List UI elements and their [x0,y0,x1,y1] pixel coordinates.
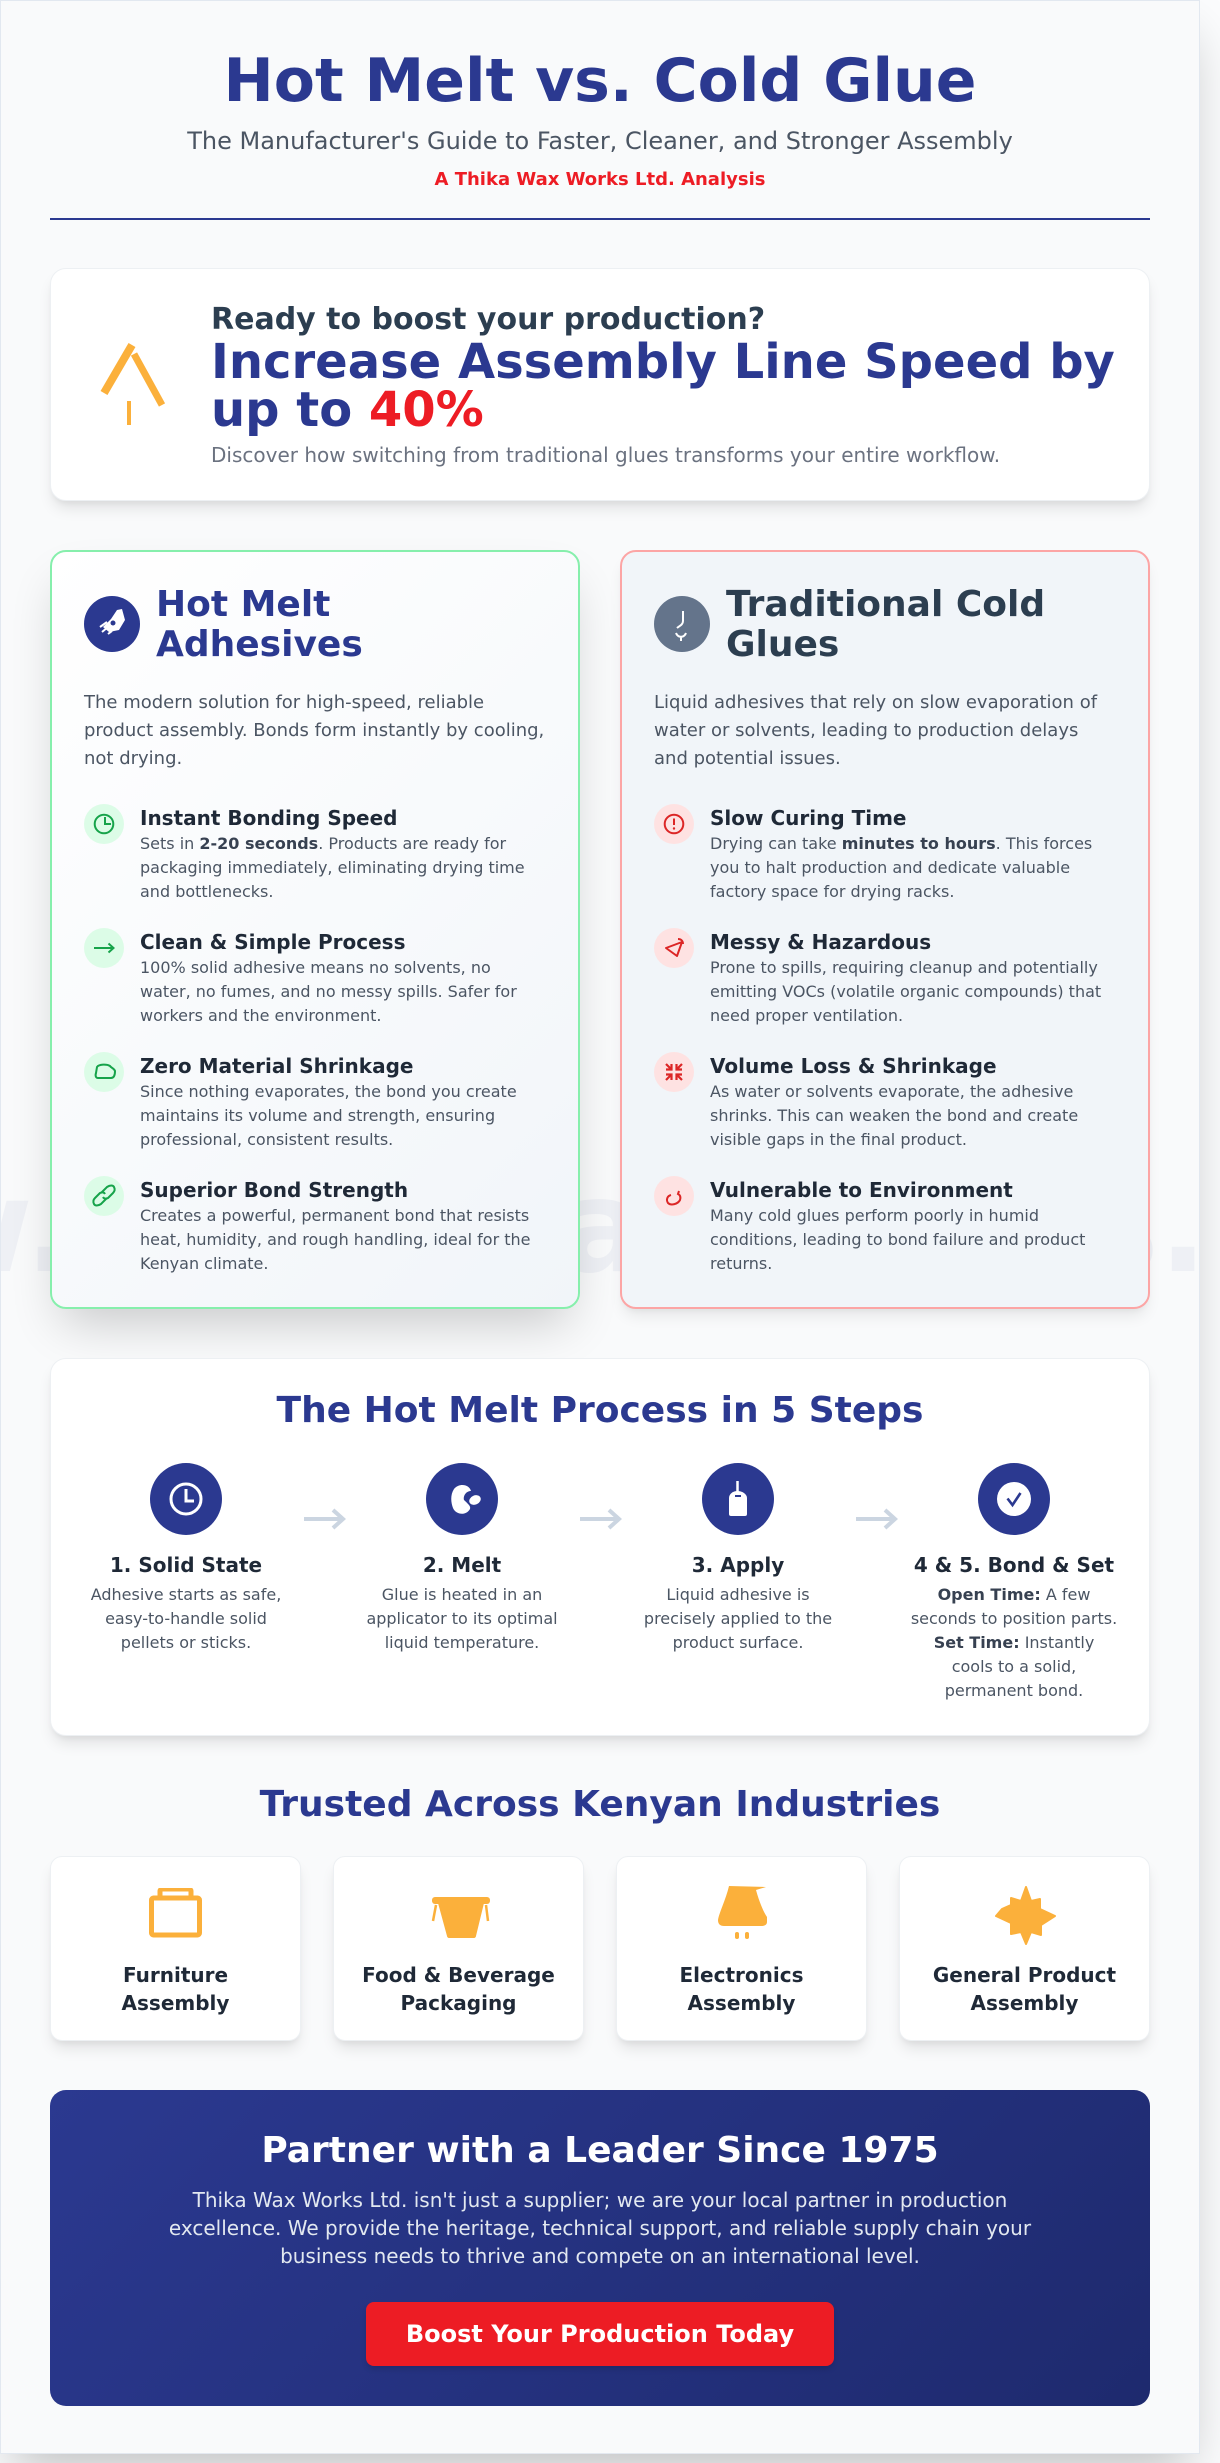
step 2 [366,1463,558,1652]
drawback text: visible gaps in the final product. [710,1130,967,1149]
icon: check [978,1463,1050,1535]
label: General Product [933,1963,1116,1987]
industry card: general product [899,1856,1150,2041]
benefit text [140,1082,517,1149]
industry card: food and beverage [333,1856,584,2041]
label: Assembly [688,1991,795,2015]
step 4 and 5 text: seconds to position parts. [911,1609,1117,1628]
icon: arrow [84,928,124,968]
cold glue description: water or solvents, leading to production delays [654,720,1078,741]
icon: blob [84,1052,124,1092]
benefit text: 100% solid adhesive means no solvents, no [140,958,491,977]
hot melt heading [156,584,363,665]
benefit: superior bond strength [84,1176,531,1273]
benefit: instant bonding speed [84,804,525,901]
step 1 [90,1463,281,1652]
icon: hook [654,1176,694,1216]
hero headline: Increase Assembly Line Speed by [211,334,1115,390]
step 3 text: product surface. [673,1633,803,1652]
icon: star badge [993,1885,1059,1947]
step 4 and 5 text: permanent bond. [945,1681,1083,1700]
benefit text [140,1206,531,1273]
drawback text: shrinks. This can weaken the bond and create [710,1106,1078,1125]
label: Assembly [122,1991,229,2015]
button: Boost Your Production Today [406,2320,794,2348]
analysis label: A Thika Wax Works Ltd. Analysis [435,169,765,190]
drawback: vulnerable to environment [654,1176,1085,1273]
benefit: clean and simple process [84,928,517,1025]
industry card: furniture [50,1856,301,2041]
icon: furniture case [148,1888,204,1940]
drawback text: conditions, leading to bond failure and product [710,1230,1085,1249]
partner text: excellence. We provide the heritage, technical support, and reliable supply chain your [169,2216,1031,2240]
step 4 and 5 [894,1463,1134,1713]
benefit title: Superior Bond Strength [140,1178,408,1202]
drawback text [710,834,1092,901]
label: Packaging [400,1991,516,2015]
header divider [50,218,1150,220]
cold glue description [654,692,1098,769]
step 1 text: easy-to-handle solid [105,1609,267,1628]
drawback text [710,1206,1085,1273]
step 4 and 5 text: Open Time: A few [938,1585,1090,1604]
arrow 2 [579,1508,623,1530]
panel: traditional cold glues [620,550,1150,1309]
hot melt heading: Hot Melt [156,584,330,625]
icon: clock [84,804,124,844]
benefit text [140,834,525,901]
icon: up arrow [100,343,165,425]
cold glue heading: Traditional Cold [726,584,1045,625]
step 1 text: pellets or sticks. [121,1633,251,1652]
icon: link [84,1176,124,1216]
step 1 title: 1. Solid State [110,1553,262,1577]
panel: hot melt adhesives [50,550,580,1309]
label: Electronics [680,1963,803,1987]
step 3 [618,1463,858,1663]
benefit title: Clean & Simple Process [140,930,406,954]
icon: flask [718,1885,768,1943]
industry card: electronics [616,1856,867,2041]
hero headline [211,334,1115,438]
icon: alert [654,804,694,844]
step 1 text: Adhesive starts as safe, [91,1585,281,1604]
step 3 text: precisely applied to the [644,1609,832,1628]
drawback title: Messy & Hazardous [710,930,931,954]
drawback text: Drying can take minutes to hours. This forces [710,834,1092,853]
benefit text: Since nothing evaporates, the bond you create [140,1082,517,1101]
drawback text: you to halt production and dedicate valuable [710,858,1070,877]
icon: pellet clock [150,1463,222,1535]
step 4 and 5 title: 4 & 5. Bond & Set [914,1553,1114,1577]
process heading: The Hot Melt Process in 5 Steps [277,1390,923,1431]
drawback: slow curing time [654,804,1092,901]
panel: process steps [50,1358,1150,1736]
drawback text: factory space for drying racks. [710,882,954,901]
step 2 text: Glue is heated in an [382,1585,542,1604]
benefit title: Zero Material Shrinkage [140,1054,413,1078]
title: Hot Melt vs. Cold Glue [224,46,976,116]
icon: cup [429,1888,491,1940]
step 1 text [90,1585,281,1652]
benefit text: heat, humidity, and rough handling, ideal for the [140,1230,531,1249]
benefit text [140,958,517,1025]
label: Assembly [971,1991,1078,2015]
drawback text: As water or solvents evaporate, the adhesive [710,1082,1073,1101]
drawback title: Slow Curing Time [710,806,906,830]
cold glue heading: Glues [726,624,839,665]
partner text: business needs to thrive and compete on an international level. [280,2244,920,2268]
icon: compress arrows [654,1052,694,1092]
drawback text: need proper ventilation. [710,1006,903,1025]
hot melt description: not drying. [84,748,182,769]
drawback title: Vulnerable to Environment [710,1178,1013,1202]
benefit text: Kenyan climate. [140,1254,268,1273]
benefit text: Creates a powerful, permanent bond that resists [140,1206,529,1225]
drawback: messy and hazardous [654,928,1101,1025]
icon: glue bottle [702,1463,774,1535]
step 2 text: liquid temperature. [385,1633,539,1652]
label [51,1961,300,2017]
step 3 text [618,1583,858,1655]
subtitle: The Manufacturer's Guide to Faster, Cleaner, and Stronger Assembly [187,127,1013,155]
benefit title: Instant Bonding Speed [140,806,397,830]
hero headline: up to 40% [211,382,484,438]
benefit text: professional, consistent results. [140,1130,393,1149]
step 2 text: applicator to its optimal [366,1609,558,1628]
icon: melting glue [426,1463,498,1535]
label [334,1961,583,2017]
benefit text: packaging immediately, eliminating drying time [140,858,525,877]
arrow 3 [855,1508,899,1530]
step 2 text [342,1583,582,1655]
icon: spill [654,928,694,968]
label: Furniture [123,1963,228,1987]
step 4 and 5 text: Set Time: Instantly [934,1633,1094,1652]
industries heading: Trusted Across Kenyan Industries [260,1784,940,1825]
step 4 and 5 text: cools to a solid, [952,1657,1076,1676]
benefit text: workers and the environment. [140,1006,382,1025]
hot melt description: product assembly. Bonds form instantly by cooling, [84,720,544,741]
header [50,46,1150,220]
icon: drip badge [654,596,710,652]
hero note: Discover how switching from traditional glues transforms your entire workflow. [211,443,1000,467]
arrow 1 [304,1508,346,1530]
benefit text: water, no fumes, and no messy spills. Safer for [140,982,517,1001]
hero eyebrow: Ready to boost your production? [211,302,765,337]
benefit text: Sets in 2-20 seconds. Products are ready for [140,834,506,853]
cold glue description: Liquid adhesives that rely on slow evaporation of [654,692,1097,713]
step 2 title: 2. Melt [423,1553,501,1577]
drawback text [710,958,1101,1025]
drawback text [710,1082,1078,1149]
benefit: zero material shrinkage [84,1052,517,1149]
step 3 text: Liquid adhesive is [666,1585,810,1604]
drawback: volume loss and shrinkage [654,1052,1078,1149]
drawback title: Volume Loss & Shrinkage [710,1054,997,1078]
benefit text: and bottlenecks. [140,882,273,901]
partner text: Thika Wax Works Ltd. isn't just a supplier; we are your local partner in production [193,2188,1007,2212]
drawback text: Prone to spills, requiring cleanup and potentially [710,958,1098,977]
benefit text: maintains its volume and strength, ensuring [140,1106,495,1125]
button [366,2302,834,2366]
hot melt description: The modern solution for high-speed, reliable [84,692,484,713]
drawback text: Many cold glues perform poorly in humid [710,1206,1039,1225]
drawback text: returns. [710,1254,772,1273]
partner text [50,2186,1150,2270]
hot melt description [84,692,544,769]
label [617,1961,866,2017]
hot melt heading: Adhesives [156,624,363,665]
icon: rocket badge [84,596,140,652]
cold glue description: and potential issues. [654,748,841,769]
step 4 and 5 text [894,1583,1134,1703]
step 3 title: 3. Apply [692,1553,784,1577]
label: Food & Beverage [362,1963,555,1987]
panel: speed hero [50,268,1150,501]
partner heading: Partner with a Leader Since 1975 [261,2130,939,2171]
drawback text: emitting VOCs (volatile organic compounds) that [710,982,1101,1001]
panel: partner call to action [50,2090,1150,2406]
cold glue heading [726,584,1045,665]
label [900,1961,1149,2017]
